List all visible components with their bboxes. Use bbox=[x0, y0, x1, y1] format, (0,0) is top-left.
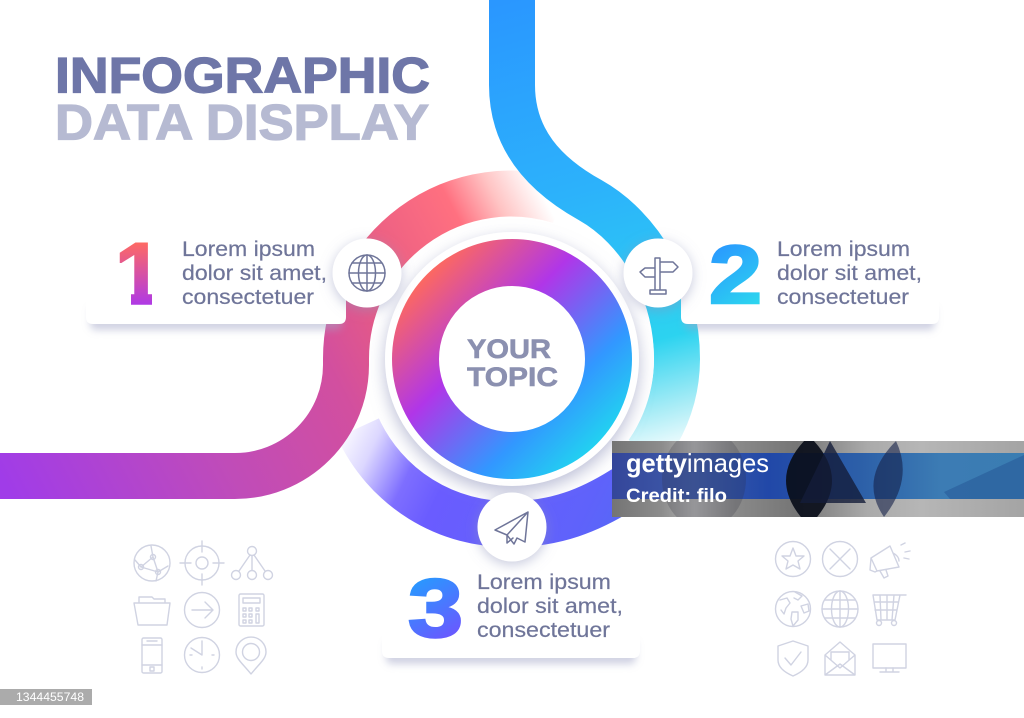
number 1: 1 bbox=[115, 224, 163, 323]
image id tag bbox=[0, 689, 92, 705]
watermark logo: gettyimages bbox=[626, 448, 769, 478]
icon: phone bbox=[142, 638, 162, 673]
number 2: 2 bbox=[709, 228, 762, 321]
icon: earth bbox=[776, 592, 810, 626]
icon: pin bbox=[236, 637, 266, 674]
icon: folder bbox=[134, 597, 170, 625]
icon: hierarchy bbox=[232, 546, 272, 580]
center label bbox=[467, 334, 558, 392]
center mat disc bbox=[370, 217, 654, 501]
icon: monitor bbox=[873, 644, 906, 672]
image id tag: 1344455748 bbox=[16, 690, 84, 704]
text 2: dolor sit amet, bbox=[777, 262, 922, 285]
icon: globe bbox=[822, 591, 858, 627]
icon: clock bbox=[184, 638, 220, 672]
number 3: 3 bbox=[408, 562, 463, 654]
icon grid right bbox=[776, 542, 910, 676]
center circle bbox=[385, 232, 639, 486]
gradient donut bbox=[416, 262, 608, 456]
watermark shapes bbox=[662, 441, 1024, 517]
text 1: consectetuer bbox=[182, 286, 314, 309]
text 3 bbox=[477, 571, 623, 642]
card 2 bbox=[681, 228, 939, 330]
text 1 bbox=[182, 238, 327, 309]
center label: TOPIC bbox=[467, 362, 558, 392]
title: INFOGRAPHIC bbox=[55, 48, 430, 104]
text 3: consectetuer bbox=[477, 619, 610, 642]
node: signpost bbox=[624, 238, 692, 308]
watermark credit: Credit: filo bbox=[626, 485, 727, 507]
watermark band bbox=[612, 453, 1024, 499]
icon: cart bbox=[873, 595, 906, 626]
card 3 bbox=[382, 562, 640, 664]
icon: shield bbox=[778, 641, 808, 676]
text 2: consectetuer bbox=[777, 286, 909, 309]
bottom ribbon to the right edge bbox=[358, 428, 1024, 524]
icon: calculator bbox=[239, 594, 264, 626]
icon: network globe bbox=[134, 545, 170, 581]
text 2: Lorem ipsum bbox=[777, 238, 910, 261]
icon: megaphone bbox=[870, 543, 910, 578]
text 3: dolor sit amet, bbox=[477, 595, 623, 618]
center label: YOUR bbox=[467, 334, 551, 364]
icon: target bbox=[180, 541, 224, 585]
text 1: dolor sit amet, bbox=[182, 262, 327, 285]
left ribbon into red ring bbox=[0, 194, 560, 476]
text 3: Lorem ipsum bbox=[477, 571, 611, 594]
icon grid left bbox=[134, 541, 272, 674]
text 1: Lorem ipsum bbox=[182, 238, 315, 261]
watermark bbox=[612, 441, 1024, 517]
top blue ribbon into cyan ring bbox=[512, 0, 677, 452]
node: paper plane bbox=[478, 492, 546, 562]
text 2 bbox=[777, 238, 922, 309]
title: DATA DISPLAY bbox=[55, 94, 429, 150]
icon: cross circle bbox=[822, 542, 858, 576]
card 1 bbox=[86, 240, 346, 334]
icon: star circle bbox=[776, 542, 810, 576]
node: globe bbox=[332, 238, 402, 308]
icon: arrow circle bbox=[184, 592, 220, 628]
title bbox=[55, 48, 430, 150]
icon: envelope bbox=[825, 642, 855, 675]
